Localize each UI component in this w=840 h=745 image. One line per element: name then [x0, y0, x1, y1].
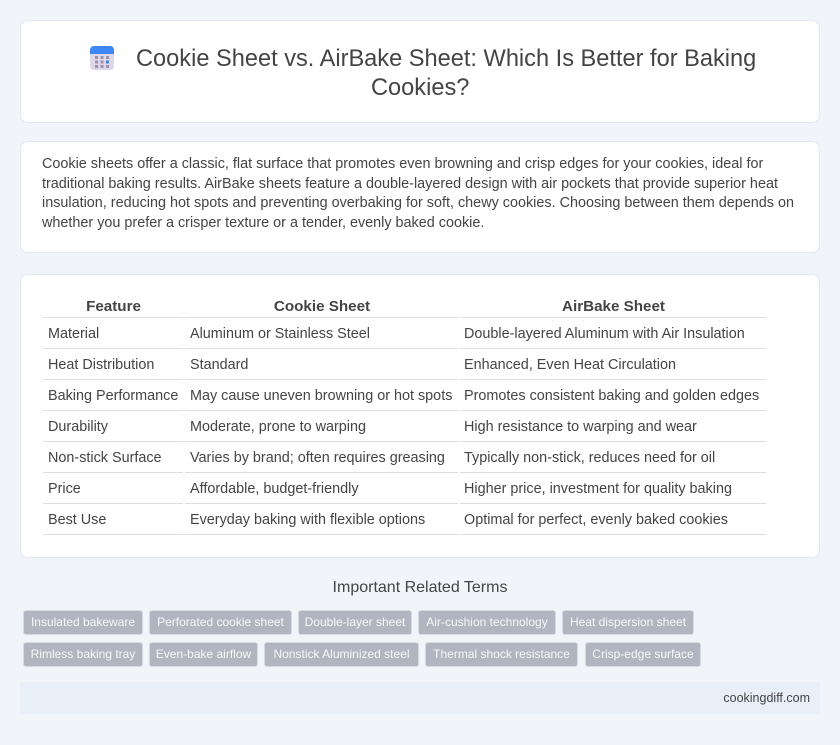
intro text: traditional baking results. AirBake sheets feature a double-layered design with air pockets that provide superior heat	[42, 176, 778, 192]
intro text: whether you prefer a crisper texture or a tender, evenly baked cookie.	[42, 214, 484, 230]
row: material: Material	[48, 326, 99, 342]
tag row 1	[23, 610, 694, 635]
footer site name: cookingdiff.com	[723, 691, 810, 705]
row: non-stick surface	[48, 450, 715, 466]
row: durability: Moderate, prone to warping	[190, 419, 366, 435]
row: durability	[48, 419, 697, 435]
row: best use	[48, 512, 728, 528]
tag row 1: Insulated bakeware	[31, 615, 135, 629]
title: Cookie Sheet vs. AirBake Sheet: Which Is Better for Baking	[136, 46, 756, 72]
row: durability: High resistance to warping and wear	[464, 419, 697, 435]
row: non-stick surface: Varies by brand; often requires greasing	[190, 450, 445, 466]
tag row 1: Air-cushion technology	[426, 615, 548, 629]
row: price: Price	[48, 481, 81, 497]
row: baking performance: Promotes consistent baking and golden edges	[464, 388, 759, 404]
row: heat distribution: Standard	[190, 357, 248, 373]
row: price	[48, 481, 732, 497]
row: best use: Everyday baking with flexible options	[190, 512, 425, 528]
tag row 2	[23, 642, 701, 667]
row: baking performance: Baking Performance	[48, 388, 178, 404]
row: non-stick surface: Typically non-stick, reduces need for oil	[464, 450, 715, 466]
row: price: Higher price, investment for quality baking	[464, 481, 732, 497]
tag row 2: Even-bake airflow	[156, 647, 251, 661]
row: baking performance: May cause uneven browning or hot spots	[190, 388, 452, 404]
row: material: Double-layered Aluminum with Air Insulation	[464, 326, 745, 342]
tag row 1: Heat dispersion sheet	[570, 615, 686, 629]
title	[136, 46, 756, 101]
row: durability: Durability	[48, 419, 108, 435]
row: material	[48, 326, 745, 342]
related terms tags	[23, 610, 701, 667]
tag row 2: Nonstick Aluminized steel	[273, 647, 410, 661]
row: heat distribution	[48, 357, 676, 373]
intro text	[42, 156, 794, 230]
row: heat distribution: Enhanced, Even Heat Circulation	[464, 357, 676, 373]
row: price: Affordable, budget-friendly	[190, 481, 359, 497]
table header row: Feature	[86, 298, 141, 315]
related terms heading: Important Related Terms	[333, 579, 507, 596]
table header row: AirBake Sheet	[562, 298, 665, 315]
table header row	[86, 298, 665, 315]
tag row 1: Perforated cookie sheet	[157, 615, 284, 629]
footer bar	[20, 682, 820, 714]
tag row 2: Rimless baking tray	[31, 647, 135, 661]
intro paragraph panel	[20, 141, 820, 253]
intro text: Cookie sheets offer a classic, flat surface that promotes even browning and crisp edges for your cookies, ideal for	[42, 156, 763, 172]
row: best use: Best Use	[48, 512, 106, 528]
icon: calendar grid	[90, 46, 114, 70]
row: material: Aluminum or Stainless Steel	[190, 326, 370, 342]
intro text: insulation, reducing hot spots and preventing overbaking for soft, chewy cookies. Choosing between them depends on	[42, 195, 794, 211]
row: non-stick surface: Non-stick Surface	[48, 450, 162, 466]
row: best use: Optimal for perfect, evenly baked cookies	[464, 512, 728, 528]
comparison table panel	[20, 274, 820, 558]
tag row 2: Crisp-edge surface	[592, 647, 694, 661]
table header row: Cookie Sheet	[274, 298, 370, 315]
row: baking performance	[48, 388, 759, 404]
tag row 1: Double-layer sheet	[305, 615, 405, 629]
tag row 2: Thermal shock resistance	[433, 647, 570, 661]
row: heat distribution: Heat Distribution	[48, 357, 154, 373]
header panel	[20, 20, 820, 123]
title: Cookies?	[371, 75, 469, 101]
